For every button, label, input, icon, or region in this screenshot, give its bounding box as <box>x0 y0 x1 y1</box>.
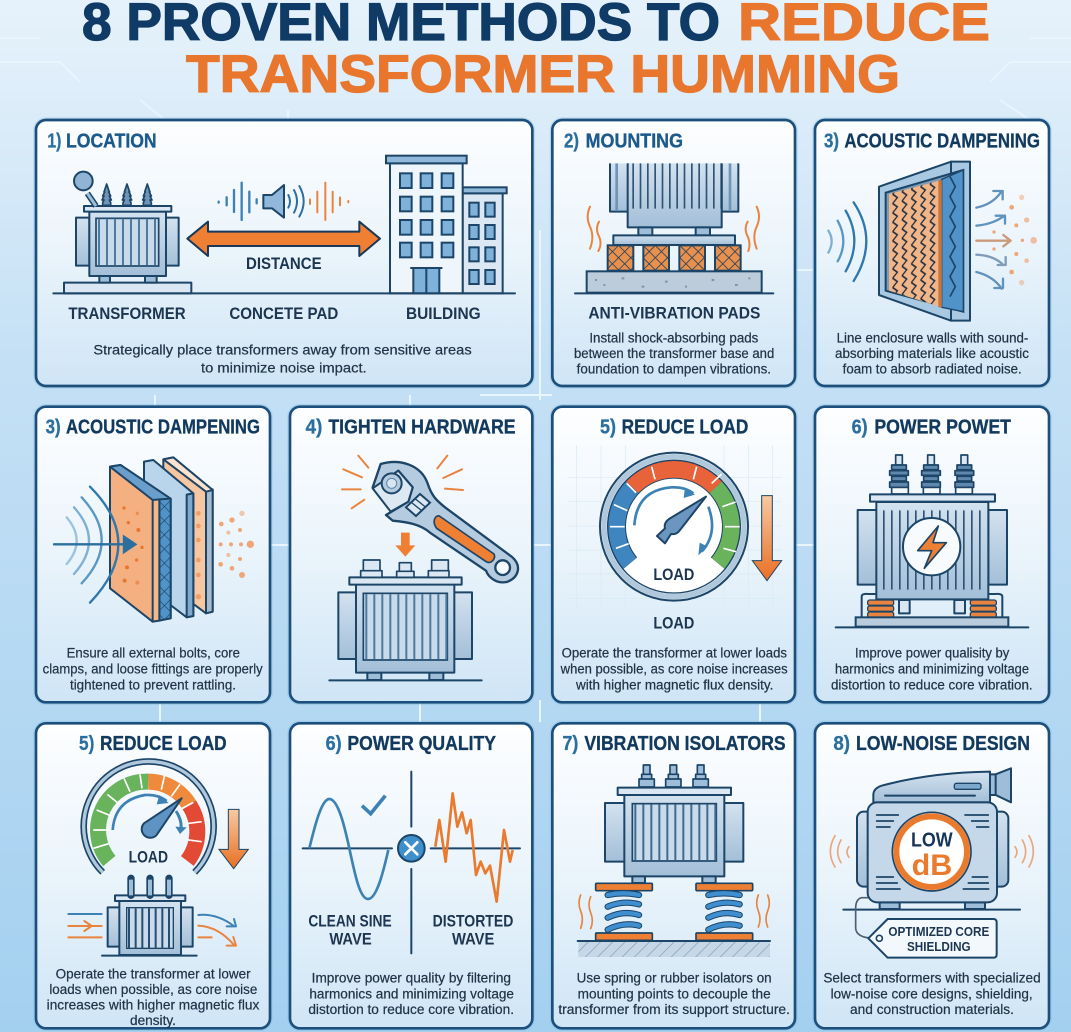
heading: tighten hardware: TIGHTEN HARDWARE <box>328 416 516 438</box>
icon: impact rays <box>342 456 463 508</box>
icon: building <box>386 156 507 293</box>
description: power quality <box>308 971 514 1017</box>
panel: 3) acoustic dampening layers <box>36 407 270 702</box>
description: location: Strategically place transformers away from sensitive areas <box>93 342 472 357</box>
panel: 1) location <box>36 120 532 386</box>
heading: vibration isolators: VIBRATION ISOLATORS <box>584 733 786 755</box>
icon: low-noise transformer unit: LOW <box>911 828 953 851</box>
description: low-noise design: low-noise core designs, shielding, <box>831 986 1033 1001</box>
heading: power powet: POWER POWET <box>874 416 1011 438</box>
chart: clean sine wave <box>303 772 411 953</box>
icon: load gauge <box>600 453 748 601</box>
description: acoustic dampening <box>835 330 1029 377</box>
icon: load gauge: LOAD <box>653 565 694 584</box>
panel: 8) low-noise design <box>815 723 1049 1028</box>
icon: low-noise transformer unit: dB <box>912 849 952 882</box>
label: anti-vibration pads: ANTI-VIBRATION PADS <box>588 304 760 323</box>
icon: transformer with bolts <box>329 560 482 680</box>
icon: low-noise transformer unit <box>843 768 1020 910</box>
icon: acoustic foam panel <box>879 162 970 321</box>
icon: sound waves with arrow <box>54 487 135 603</box>
description: low-noise design <box>823 971 1041 1017</box>
heading: low-noise design: LOW-NOISE DESIGN <box>856 733 1030 755</box>
icon: transformer on anti-vibration pads <box>575 163 773 293</box>
label: distance: DISTANCE <box>246 254 322 273</box>
heading: reduce load: REDUCE LOAD <box>100 733 227 755</box>
panel: 6) power quality <box>290 723 532 1028</box>
heading: reduce load: REDUCE LOAD <box>622 416 748 438</box>
label: load: LOAD <box>653 614 694 633</box>
description: power quality: Improve power quality by filtering <box>312 971 511 986</box>
description: hardware text: clamps, and loose fittings are properly <box>43 661 263 676</box>
description: hardware text <box>43 646 263 692</box>
description: low-noise design: and construction materials. <box>850 1002 1014 1017</box>
heading: reduce load: 5) <box>600 416 616 438</box>
arrow: load decreasing <box>752 496 782 581</box>
description: reduce load: Operate the transformer at lower <box>56 966 251 981</box>
arrow: load decreasing <box>219 809 248 869</box>
labels: wave types <box>308 912 513 948</box>
labels: transformer, pad, building: TRANSFORMER <box>68 304 186 323</box>
heading: power quality: 6) <box>326 733 342 755</box>
icon: wrench <box>373 462 518 582</box>
heading: power powet: 6) <box>852 416 868 438</box>
description: power quality: Improve power qualisity by <box>855 646 1009 661</box>
description: location: to minimize noise impact. <box>201 360 367 375</box>
title: TRANSFORMER HUMMING <box>186 45 900 104</box>
labels: wave types: CLEAN SINE <box>308 912 392 931</box>
description: power quality: distortion to reduce core vibration. <box>831 677 1033 692</box>
labels: wave types: DISTORTED <box>433 912 513 931</box>
panel: 6) power powet <box>815 407 1049 702</box>
heading: location: 1) <box>47 130 61 152</box>
description: hardware text: Ensure all external bolts, core <box>67 646 240 661</box>
icon: load gauge <box>84 761 214 872</box>
description: reduce load: Operate the transformer at lower loads <box>562 646 787 661</box>
icon: load gauge: LOAD <box>129 847 168 866</box>
description: power quality: harmonics and minimizing voltage <box>309 986 514 1001</box>
labels: wave types: WAVE <box>452 929 494 948</box>
description: reduce load: with higher magnetic flux density. <box>575 677 773 692</box>
panel: 5) reduce load with transformer <box>36 723 270 1028</box>
description: location <box>93 342 472 375</box>
callout: optimized core shielding tag <box>856 898 997 958</box>
icon: cross badge <box>398 835 425 862</box>
description: reduce load: loads when possible, as core noise <box>49 982 257 997</box>
description: mounting: Install shock-absorbing pads <box>589 330 758 345</box>
heading: low-noise design: 8) <box>833 733 850 755</box>
title <box>82 0 990 104</box>
description: vibration isolators: Use spring or rubber isolators on <box>577 971 772 986</box>
icon: incoming sound waves <box>828 202 866 281</box>
description: vibration isolators: transformer from its support structure. <box>558 1002 790 1017</box>
heading: power quality: POWER QUALITY <box>347 733 496 755</box>
description: mounting: between the transformer base and <box>574 346 774 361</box>
heading: acoustic dampening: ACOUSTIC DAMPENING <box>66 416 260 438</box>
icon: speaker with sound waves <box>219 183 348 220</box>
labels: wave types: WAVE <box>329 929 372 948</box>
heading: acoustic dampening: ACOUSTIC DAMPENING <box>844 130 1040 152</box>
description: hardware text: tightened to prevent rattling. <box>70 677 236 692</box>
arrow: distance <box>187 222 380 256</box>
heading: tighten hardware: 4) <box>306 416 322 438</box>
icon: transformer <box>64 172 191 293</box>
description: mounting <box>574 330 774 377</box>
description: reduce load: increases with higher magnetic flux <box>47 998 259 1013</box>
icon: transformer on springs <box>578 765 770 957</box>
panel: 3) acoustic dampening <box>815 120 1049 386</box>
labels: transformer, pad, building: BUILDING <box>406 304 481 323</box>
panel: 7) vibration isolators <box>552 723 795 1028</box>
callout: optimized core shielding tag: SHIELDING <box>907 940 971 954</box>
description: power quality: harmonics and minimizing voltage <box>835 661 1029 676</box>
description: reduce load <box>560 646 788 692</box>
heading: reduce load: 5) <box>79 733 94 755</box>
description: low-noise design: Select transformers with specialized <box>823 971 1041 986</box>
heading: mounting: 2) <box>564 130 579 152</box>
heading: acoustic dampening: 3) <box>46 416 61 438</box>
icon: transformer with flow arrows <box>68 878 236 956</box>
icon: reduced noise arrows and dots <box>976 191 1037 289</box>
heading: location: LOCATION <box>66 130 157 152</box>
description: mounting: foundation to dampen vibrations. <box>577 362 771 377</box>
icon: layered acoustic panels <box>110 457 213 622</box>
description: vibration isolators <box>558 971 790 1017</box>
heading: mounting: MOUNTING <box>586 130 683 152</box>
heading: vibration isolators: 7) <box>562 733 578 755</box>
icon: faint sound waves <box>830 836 1033 867</box>
description: acoustic dampening: absorbing materials like acoustic <box>835 346 1029 361</box>
chart: distorted wave <box>431 793 520 902</box>
description: power quality: distortion to reduce core vibration. <box>308 1002 514 1017</box>
description: acoustic dampening: Line enclosure walls with sound- <box>837 330 1028 345</box>
icon: dissipated noise dots <box>218 511 254 578</box>
arrow: tighten down <box>395 533 415 557</box>
description: reduce load: when possible, as core noise increases <box>560 661 788 676</box>
panel: 5) reduce load <box>552 407 795 702</box>
description: reduce load: density. <box>130 1013 176 1028</box>
heading: acoustic dampening: 3) <box>824 130 839 152</box>
labels: transformer, pad, building <box>68 304 481 323</box>
callout: optimized core shielding tag: OPTIMIZED CORE <box>888 925 989 939</box>
description: reduce load <box>47 966 259 1028</box>
panel: 2) mounting <box>552 120 795 386</box>
panel: 4) tighten hardware <box>290 407 532 702</box>
description: vibration isolators: mounting points to decouple the <box>578 986 771 1001</box>
description: acoustic dampening: foam to absorb radiated noise. <box>843 362 1022 377</box>
labels: transformer, pad, building: CONCETE PAD <box>229 304 338 323</box>
description: power quality <box>831 646 1033 692</box>
icon: transformer with lightning <box>836 455 1028 627</box>
